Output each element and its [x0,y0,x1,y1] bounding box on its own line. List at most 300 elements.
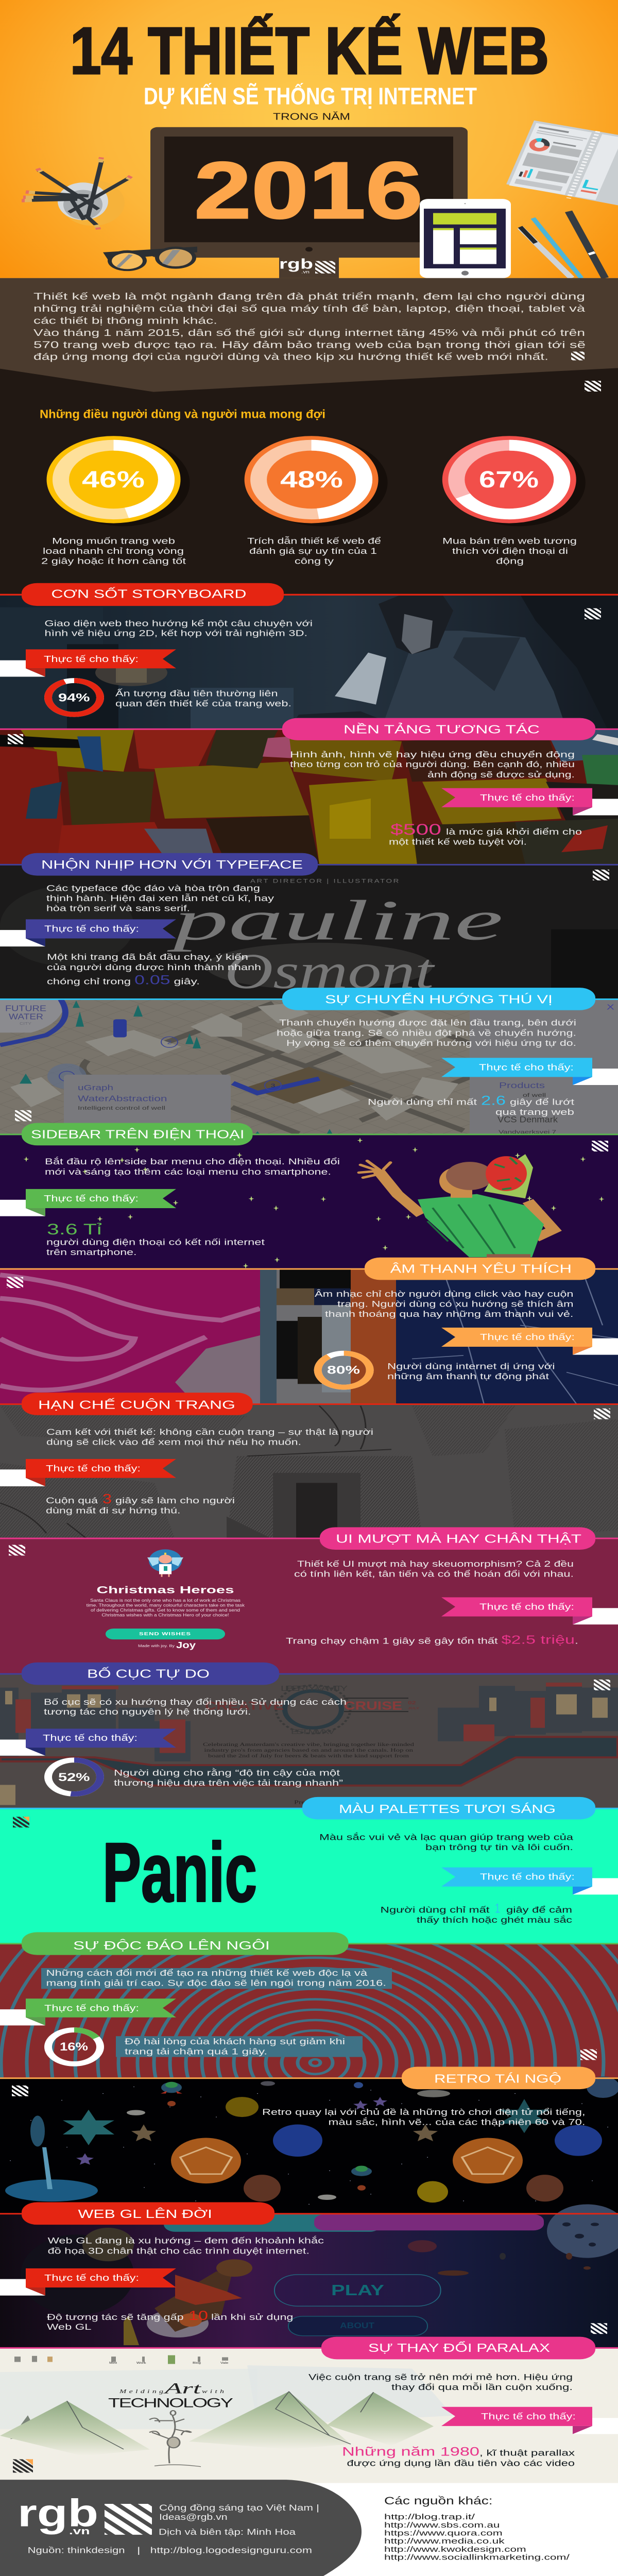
body text: dùng sẽ click vào để xem mọi thứ nếu họ muốn. [46,1438,301,1447]
icon: hatch mark [7,1277,23,1288]
body text: Âm nhạc chỉ chờ người dùng click vào hay cuộn [315,1290,574,1299]
stat text [46,1492,235,1515]
section heading pill [365,1258,595,1280]
panel: flat UI section [0,1527,618,1674]
body text [262,2108,585,2127]
footer dark shape [0,2480,362,2576]
stat text: Ấn tượng đầu tiên thường liên [115,689,278,698]
body text [48,2236,324,2256]
section heading pill: BỐ CỤC TỰ DO [87,1667,210,1681]
illustration: isometric water city map: WATER [9,1012,43,1021]
body text: Hy vọng sẽ có thêm chuyển hướng với hiệu ứng tự do. [286,1039,576,1048]
stat text: trên smartphone. [46,1248,136,1257]
illustration: abstract paint [0,730,618,865]
intro text [33,291,586,362]
section heading pill: SIDEBAR TRÊN ĐIỆN THOẠI [31,1128,244,1141]
credits: http://blog.logodesignguru.com [150,2546,312,2555]
section heading pill [22,1393,252,1415]
illustration: watercolor mountains: Mint [109,2362,117,2364]
stat text: chóng chỉ trong [47,977,131,986]
illustration: amsterdam canal: Pre [294,1799,305,1805]
section heading pill: NỀN TẢNG TƯƠNG TÁC [344,723,540,736]
illustration: watercolor mountains: Blog [193,2362,201,2364]
ribbon: Thực tế cho thấy: [479,1601,574,1612]
credits: Cộng đồng sáng tạo Việt Nam | [159,2503,319,2513]
illustration: isometric water city map: Products [499,1081,545,1090]
stat text [47,953,261,987]
caption: mobile: Mua bán trên web tương [442,537,577,546]
button: about: ABOUT [340,2321,375,2330]
stat text: được ứng dụng lần đầu tiên vào các video [347,2459,575,2468]
icon: hatch mark [12,2086,28,2096]
ribbon [0,1189,176,1216]
caption: load speed: Mong muốn trang web [52,537,175,546]
chart: 16 percent donut [48,2030,100,2064]
stat text: dùng mất đi sự hứng thú. [46,1506,180,1515]
ribbon: Thực tế cho thấy: [480,792,575,803]
illustration: calligraphy on dark waterfall: ART DIRECTOR | ILLUSTRATOR [250,878,400,884]
illustration: amsterdam canal [0,1674,618,1809]
body text: Thiết kế UI mượt mà hay skeuomorphism? Cả 2 đều [297,1560,574,1569]
wordmark: Art [163,2380,202,2397]
chart: 52 percent donut: 52% [58,1771,90,1784]
ribbon [0,2268,176,2296]
body text [46,884,274,913]
section heading pill [22,583,284,606]
stat text [47,2309,293,2332]
divider line [0,2347,618,2349]
chart: 46 percent ring: 46% [82,466,145,493]
body text [44,1698,347,1717]
stat text: thấy thích hoặc ghét màu sắc [417,1916,572,1925]
stat text: $500 [390,821,441,838]
icon: plant [149,2411,201,2467]
divider line [0,1403,618,1405]
body text [315,1290,574,1319]
illustration: calligraphy on dark waterfall: Osmont [225,943,435,999]
caption: credibility: đánh giá sự uy tín của 1 [249,547,377,556]
icon: tablet wireframe [420,199,511,278]
body text [45,1157,340,1177]
chart: 94 percent donut: 94% [58,691,90,704]
panel: hero header [0,0,618,278]
stat text: qua trang web [495,1108,574,1117]
logo: rgb [18,2492,152,2537]
stat text: 2.6 [481,1093,506,1108]
body text: màu sắc, hình vẽ... của các thập niên 60 và 70. [329,2118,585,2127]
stat text: những âm thanh tự động phát [387,1372,549,1381]
illustration: concentric arcs [0,1944,618,2077]
caption: credibility: công ty [295,557,334,566]
icon: hatch mark [15,1110,31,1121]
illustration: marble textures [0,1269,618,1404]
caption: credibility [247,537,381,566]
year number: 2016 [194,145,423,235]
chart: 67 percent ring [442,436,586,526]
stat text: Những năm 1980 [342,2445,479,2459]
illustration: retro space game [0,2076,618,2214]
chart: 46 percent ring [46,436,190,526]
stat text [368,1093,574,1117]
illustration: christmas heroes screen: Christmas wishes with a Christmas Hero of your choice! [101,1613,229,1618]
section heading pill [282,988,595,1010]
ribbon: Thực tế cho thấy: [46,1463,141,1473]
wordmark: with [202,2388,224,2394]
section heading pill: SỰ CHUYỂN HƯỚNG THÚ VỊ [325,993,553,1006]
ribbon: Thực tế cho thấy: [44,2273,139,2283]
panel: interactive platform section [0,718,618,865]
icon: hatch mark [13,1817,29,1827]
ribbon [0,1459,176,1486]
body text: Việc cuộn trang sẽ trở nên mới mẻ hơn. Hiệu ứng [308,2373,573,2382]
source list: http://blog.trap.it/ [384,2513,475,2521]
section heading pill: CƠN SỐT STORYBOARD [51,587,246,601]
button: send wishes [106,1629,225,1639]
ribbon [441,1868,618,1894]
icon: glasses [103,247,197,271]
intro text: các thiết bị thông minh khác. [33,315,217,326]
stat text: Người dùng chỉ mất [368,1098,477,1107]
illustration: amsterdam canal: industry pro's from agencies based on and around the canals. Hop on [204,1747,414,1753]
stat text: Độ tương tác sẽ tăng gấp [47,2313,184,2322]
icon: notebook [506,121,618,206]
body text: hình vẽ hiệu ứng 2D, kết hợp với trải nghiệm 3D. [44,629,307,638]
stat text [342,2445,575,2468]
body text: ảnh động sẽ được sử dụng. [427,770,575,779]
body text: thịnh hành. Hiện đại xen lẫn nét cũ kĩ, hay [46,894,274,903]
icon: rgb logo on stand [279,256,335,275]
illustration: amsterdam canal: Celebrating Amsterdam's creative vibe, bringing together like-minded [203,1742,415,1748]
divider line [0,2213,618,2214]
illustration: christmas heroes screen: Christmas Heroes [97,1584,234,1596]
icon: hatch mark [585,608,601,619]
stat text: 10 [188,2309,208,2323]
stat text: giây để cảm [506,1906,572,1914]
body text [290,750,575,779]
logo: rgb: rgb [18,2492,98,2535]
ribbon: Thực tế cho thấy: [479,1062,574,1072]
panel: retro section [0,2066,618,2214]
chart: 52 percent donut [48,1760,100,1794]
body text: hòa trộn serif và sans serif. [46,904,190,913]
divider line [0,1673,618,1675]
body text: Bắt đầu rộ lên side bar menu cho điện thoại. Nhiều đổi [45,1157,340,1166]
icon: hatch mark [9,1545,25,1555]
stat text [114,1769,343,1788]
panel: storyboard section [0,583,618,730]
panel: user expectations [40,381,601,566]
illustration: christmas heroes screen: Santa Claus is not the only one who has a lot of work at Christmas [90,1598,241,1603]
button: play [274,2275,441,2306]
source list: http://www.media.co.uk [384,2537,505,2545]
section heading pill: ÂM THANH YÊU THÍCH [390,1263,572,1276]
stat text [46,1222,265,1257]
stat text: thương hiệu dựa trên việc tải trang nhanh” [114,1778,343,1788]
icon: hatch mark [593,870,609,880]
panel: bright palettes section: Panic [102,1825,257,1919]
illustration: woman at computer [0,595,618,730]
stat text: . [575,1637,578,1646]
icon: hatch mark [591,2323,607,2334]
chart: 80 percent donut: 80% [327,1364,360,1377]
divider line [0,728,618,730]
ribbon [0,649,176,676]
divider line [0,1538,618,1539]
icon: hatch mark [8,734,23,744]
body text: thanh thoáng qua hay những âm thanh vui vẻ. [325,1310,574,1319]
intro text: 570 trang web được tạo ra. Hãy đảm bảo trang web của bạn trong thời gian tới sẽ [33,340,586,350]
chart: 67 percent ring: 67% [479,466,539,493]
caption: load speed: 2 giây hoặc ít hơn càng tốt [41,557,186,566]
section heading pill [282,718,595,740]
body text [41,1968,392,1989]
body text: Các typeface độc đáo và hòa trộn đang [46,884,260,893]
ribbon: Thực tế cho thấy: [480,1872,575,1882]
caption: mobile: thích với điện thoại di [452,547,568,556]
stat text [115,689,291,708]
section heading pill [22,2202,274,2225]
source list: http://www.sbs.com.au [384,2521,500,2529]
illustration: christmas heroes screen: of delivering Christmas gifts. Get to know some of them and send [91,1608,240,1613]
illustration: isometric water city map: 3 [271,1082,275,1089]
intro text: Thiết kế web là một ngành đang trên đà phát triển mạnh, đem lại cho người dùng [33,291,585,302]
body text: mang tính giải trí cao. Sự độc đáo sẽ lên ngôi trong năm 2016. [46,1979,386,1988]
ribbon: Thực tế cho thấy: [481,2411,576,2421]
ribbon [0,1998,176,2025]
body text: Hình ảnh, hình vẽ hay hiệu ứng đều chuyển động [290,750,575,759]
stat text: giây để lướt [510,1098,574,1107]
icon: angel character [147,1549,183,1577]
panel: introduction [0,278,618,595]
sheep character [124,2259,252,2345]
divider line [0,1268,618,1270]
section heading pill [22,1663,279,1685]
illustration: isometric water city map: Vandvaerksvej 7 [499,1129,556,1135]
stat text: quan đến thiết kế của trang web. [115,699,291,708]
illustration: christmas heroes screen: Joy [176,1640,196,1650]
heading: expectations: Những điều người dùng và người mua mong đợi [40,408,325,421]
body text [308,2373,573,2392]
section heading pill [22,1932,348,1955]
illustration: christmas heroes screen: time. Throughout the world, many colourful characters take on the task [87,1603,245,1608]
body text: có tính liên kết, tân tiến và có thể hoán đổi với nhau. [294,1570,574,1579]
divider line [0,998,618,1000]
icon: rgb logo on stand: rgb [279,256,313,272]
body text: mới và sáng tạo thêm các loại menu cho smartphone. [45,1167,331,1177]
section heading pill [22,853,318,876]
intro text: đáp ứng mong đợi của người dùng và theo kịp xu hướng thiết kế web mới nhất. [33,352,548,362]
caption: credibility: Trích dẫn thiết kế web để [247,537,381,546]
stat text: của người dùng được hình thành nhanh [47,963,261,972]
section heading pill: WEB GL LÊN ĐỜI [78,2208,212,2221]
panel: uniqueness section [0,1932,618,2077]
ribbon [441,1328,618,1355]
ribbon [441,2407,618,2434]
button: play: PLAY [331,2282,384,2298]
panel: sound section [0,1258,618,1404]
credits: Ideas@rgb.vn [159,2513,228,2522]
panel: navigation section [0,988,618,1135]
icon: hatch mark [594,1409,610,1419]
illustration: watercolor mountains: Vale [220,2362,229,2364]
ribbon: Thực tế cho thấy: [44,2003,139,2013]
illustration: isometric water city map: Intelligent control of well [78,1106,165,1111]
nav icons [14,2355,228,2364]
source list: https://www.quora.com [384,2529,503,2537]
illustration: calligraphy on dark waterfall: pauline [167,889,503,952]
emblem: JULY [408,1706,419,1710]
stat text: Người dùng internet dị ứng với [387,1362,555,1371]
body text [44,619,313,638]
body text: hoặc giữa trang. Sẽ có nhiều đột phá về chuyển hướng. [277,1028,576,1038]
section heading pill: SỰ THAY ĐỔI PARALAX [368,2341,550,2354]
caption: mobile: động [496,557,524,566]
icon: pencil cup [22,157,131,229]
icon: rgb logo on stand: .vn [301,270,310,275]
stat text [380,1901,572,1925]
body text: theo từng con trỏ của người dùng. Bên cạnh đó, nhiều [290,760,575,769]
body text: Bố cục sẽ có xu hướng thay đổi nhiều. Sử dụng các cách [44,1698,347,1707]
stat text: $2.5 triệu [502,1634,575,1647]
icon: monitor with 2016 [150,127,468,278]
icon: hatch mark [585,381,601,392]
section heading pill: RETRO TÁI NGỘ [434,2072,561,2086]
stat text: Người dùng chỉ mất [380,1906,490,1914]
illustration: space sheep game [0,2204,618,2348]
caption: load speed [41,537,186,566]
stat text: Độ hài lòng của khách hàng sụt giảm khi [125,2037,345,2046]
emblem: 02 [408,1700,416,1705]
section heading pill: HẠN CHẾ CUỘN TRANG [38,1398,235,1412]
icon: hatch mark [580,2049,597,2060]
body text: Giao diện web theo hướng kể một câu chuyện với [44,619,313,628]
panel: mobile sidebar section [0,1123,618,1269]
ribbon: Thực tế cho thấy: [44,923,139,934]
source list: http://www.kwokdesign.com [384,2545,526,2553]
body text: thay đổi qua mỗi lần cuộn xuống. [391,2383,573,2392]
wordmark [108,2380,233,2410]
ribbon [441,1597,618,1624]
stat text: một thiết kế web tuyệt vời. [389,838,527,847]
illustration: isometric water city map: CITY [20,1022,31,1025]
divider line [0,2077,618,2079]
credits [28,2503,319,2555]
body text: Cam kết với thiết kế: không cần cuộn trang – sự thật là người [46,1428,373,1437]
illustration: isometric water city map: VCS Denmark [497,1115,558,1124]
button: send wishes: SEND WISHES [139,1632,191,1636]
body text: Retro quay lại với chủ đề là những trò chơi điện tử nổi tiếng, [262,2108,585,2117]
illustration: watercolor mountains [0,2348,618,2483]
illustration: man with roses under stars [0,1134,618,1269]
panel: typeface section [0,853,618,999]
section heading pill: SỰ ĐỘC ĐÁO LÊN NGÔI [73,1939,270,1953]
illustration: amsterdam canal: board the 2nd of July for beers & beats with the kind support from [208,1753,409,1758]
stat text: trang tải chậm quá 1 giây. [125,2047,267,2056]
chart: 48 percent ring: 48% [280,466,343,493]
body text: trang. Người dùng có xu hướng sẽ thích âm [337,1300,574,1309]
stat text: người dùng điện thoại có kết nối internet [46,1238,265,1247]
stat text: , kĩ thuật parallax [479,2449,575,2458]
stat text: Một khi trang đã bắt đầu chạy, ý kiến [47,953,248,962]
panel: WebGL section [0,2202,618,2348]
illustration: christmas heroes screen [87,1549,245,1650]
caption: mobile [442,537,577,566]
body text: Những cách đổi mới để tạo ra những thiết kế web độc lạ và [46,1969,367,1978]
credits: Dịch và biên tập: Minh Hoa [159,2528,296,2537]
chart: 80 percent donut [318,1353,370,1387]
illustration: pen sketch [0,1404,618,1539]
illustration: isometric water city map: WaterAbstraction [78,1094,167,1103]
stat text [389,821,582,847]
emblem: EST. MMXV [291,1728,335,1736]
body text: đồ họa 3D chân thật cho các trình duyệt internet. [48,2247,310,2256]
section heading pill: NHỘN NHỊP HƠN VỚI TYPEFACE [41,858,303,871]
section heading pill [302,1797,595,1820]
icon: hatch mark [594,1680,610,1690]
body text: Thanh chuyển hướng được đặt lên đầu trang, bên dưới [279,1019,576,1028]
body text [294,1560,574,1579]
stat text: Người dùng cho rằng “độ tin cậy của một [114,1769,340,1777]
body text: Màu sắc vui vẻ và lạc quan giúp trang web của [319,1833,573,1842]
stat text: 3 [102,1492,112,1506]
planets [5,2076,618,2202]
chart: 16 percent donut: 16% [60,2041,88,2054]
illustration: isometric water city map: of well [523,1092,546,1098]
section heading pill [320,1527,595,1550]
panel: parallax section [0,2337,618,2483]
illustration: watercolor mountains: Work [136,2362,146,2364]
chart: 48 percent ring [245,436,388,526]
body text [319,1833,573,1852]
source list: Các nguồn khác: [384,2495,493,2507]
divider line [0,1133,618,1135]
intro text: những trải nghiệm của thời đại số qua máy tính để bàn, laptop, điện thoại, tablet và [33,303,585,314]
stars and ships [63,2081,550,2200]
ribbon: Thực tế cho thấy: [43,1733,138,1743]
icon: hatch mark [571,351,585,360]
ribbon [0,919,176,946]
ribbon [0,1728,176,1756]
ribbon: Thực tế cho thấy: [480,1332,575,1342]
section heading pill: UI MƯỢT MÀ HAY CHÂN THẬT [336,1532,581,1546]
credits: Nguồn: thinkdesign [28,2546,125,2555]
ribbon [441,1058,618,1085]
panel: footer [0,2480,618,2576]
stat text: Web GL [47,2323,92,2332]
divider line [0,864,618,866]
stat text: lần khi sử dụng [211,2313,293,2322]
caption: load speed: load nhanh chỉ trong vòng [43,547,184,556]
emblem: LIBERTY & AMITY [281,1684,348,1692]
ribbon [441,788,618,815]
ribbon: Thực tế cho thấy: [44,654,139,664]
emblem: CREATIVE [205,1700,284,1713]
button: about [288,2316,427,2336]
chart: 94 percent donut [48,681,100,715]
subtitle: trong năm: TRONG NĂM [273,111,350,122]
illustration: calligraphy on dark waterfall [0,865,618,999]
divider line [0,1943,618,1944]
emblem: CRUISE [344,1700,402,1713]
icon: hatch mark [592,1141,608,1151]
panel: bright palettes section [0,1797,618,1943]
divider line [0,1808,618,1809]
stat text: Cuộn quá [46,1496,98,1505]
panel: limited scrolling section [0,1393,618,1539]
divider line [0,594,618,596]
body text: tương tác cho nguyên lý hệ thống lưới. [44,1707,251,1717]
logo: rgb: .vn [69,2527,90,2537]
